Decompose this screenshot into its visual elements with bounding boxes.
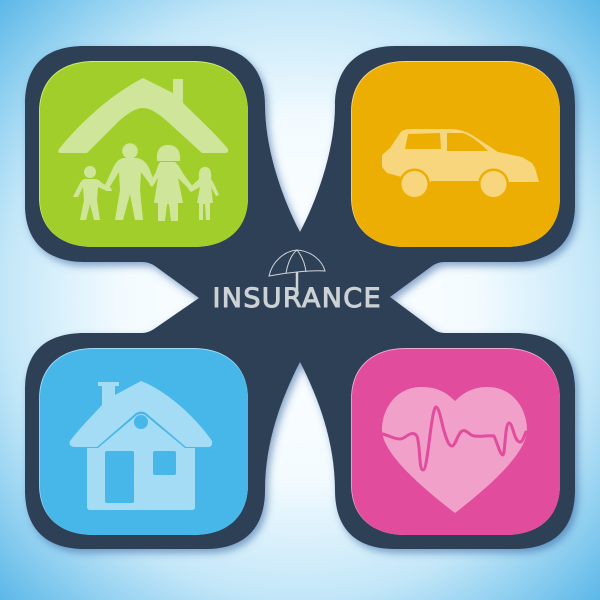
icon: house: [70, 381, 212, 510]
figure: mother: [149, 145, 194, 221]
icon: roof: [58, 78, 228, 153]
figure: girl: [188, 167, 219, 220]
panel: home insurance: [39, 348, 248, 535]
dark cross-shaped frame: [25, 46, 575, 549]
figure: father: [105, 143, 155, 220]
panel: car insurance: [351, 61, 560, 247]
central label: [212, 250, 380, 314]
icon: umbrella: [269, 250, 325, 290]
icon: family: [73, 143, 219, 221]
figure: boy: [73, 166, 112, 220]
panel: health insurance: [351, 348, 560, 535]
icon: heartbeat line: [383, 407, 526, 470]
icon: car: [382, 129, 539, 200]
panel: family insurance: [39, 61, 248, 247]
title: INSURANCE: [212, 283, 380, 314]
icon: heart: [382, 387, 527, 513]
